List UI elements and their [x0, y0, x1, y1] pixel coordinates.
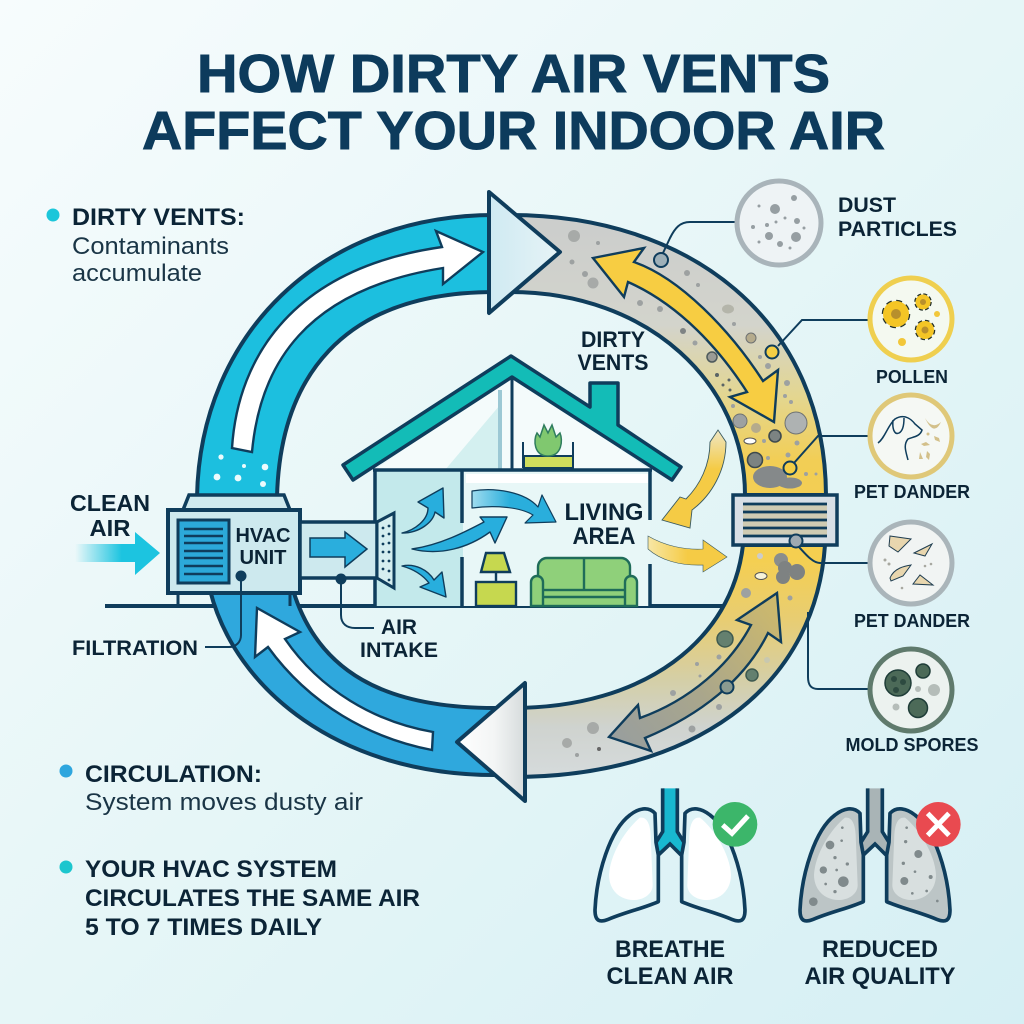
- white flow arrow upper: [232, 231, 483, 452]
- label: living area: [564, 499, 644, 550]
- text block: hvac fact: [60, 856, 420, 941]
- label: living area: AREA: [572, 523, 636, 550]
- contaminant particles: [562, 230, 818, 757]
- hvac unit: [168, 495, 300, 606]
- label: reduced air quality: [804, 936, 956, 990]
- icon: dirty lungs: [800, 788, 961, 921]
- label: breathe clean air: BREATHE: [615, 936, 725, 963]
- callout: mold spores: MOLD SPORES: [846, 735, 978, 755]
- hvac unit: UNIT: [240, 547, 286, 569]
- dirty vent grille: [733, 495, 837, 545]
- text block: dirty vents: Contaminants: [72, 233, 229, 260]
- label: living area: LIVING: [564, 499, 644, 526]
- callout: filtration: FILTRATION: [72, 637, 198, 660]
- callout: dust particles: PARTICLES: [838, 218, 957, 241]
- text block: hvac fact: 5 TO 7 TIMES DAILY: [85, 914, 322, 941]
- label: clean air: CLEAN: [70, 490, 150, 516]
- callout: air intake: INTAKE: [360, 639, 438, 662]
- duct to house: [300, 522, 377, 578]
- walls: [373, 470, 652, 606]
- callout: air intake: [336, 574, 438, 662]
- label: breathe clean air: CLEAN AIR: [606, 963, 734, 990]
- sofa: [531, 558, 637, 606]
- text block: circulation: CIRCULATION:: [85, 761, 262, 788]
- room air arrows: [402, 488, 507, 597]
- floor line: [105, 604, 735, 608]
- callout: dust particles: [654, 181, 957, 267]
- air bubbles: [214, 454, 268, 487]
- callout: air intake: AIR: [381, 616, 417, 639]
- label: reduced air quality: REDUCED: [822, 936, 938, 963]
- text block: dirty vents: [46, 204, 245, 287]
- title: [142, 44, 885, 161]
- ring arrowhead lower: [457, 683, 525, 801]
- living room: [463, 470, 650, 606]
- label: dirty vents: VENTS: [578, 350, 648, 375]
- house: [343, 356, 681, 606]
- perforated supply vent: [377, 513, 394, 588]
- ring: dirty duct: [510, 215, 826, 777]
- label: dirty vents: DIRTY: [581, 327, 645, 352]
- roof with chimney: [343, 356, 681, 480]
- text block: circulation: System moves dusty air: [85, 789, 363, 816]
- callout: pet dander one: [784, 395, 970, 502]
- callout: pet dander two: [790, 522, 970, 631]
- attic: [375, 372, 650, 470]
- white flow arrow lower: [255, 608, 433, 750]
- clean air arrow: [75, 532, 160, 575]
- label: breathe clean air: [606, 936, 734, 990]
- ring: return duct: [210, 590, 495, 775]
- callout: dust particles: DUST: [838, 194, 896, 217]
- living room air arrow: [472, 490, 556, 523]
- label: clean air: [70, 490, 150, 541]
- text block: dirty vents: accumulate: [72, 260, 202, 287]
- side room: [375, 470, 463, 606]
- callout: pollen: [766, 278, 952, 387]
- callout: mold spores: [720, 612, 978, 755]
- yellow double arrow upper: [593, 248, 778, 422]
- plant: [523, 425, 573, 468]
- label: dirty vents: [578, 327, 648, 375]
- text block: dirty vents: DIRTY VENTS:: [72, 204, 245, 231]
- callout: pet dander one: PET DANDER: [854, 482, 970, 502]
- icon: clean lungs: [595, 788, 757, 921]
- ring arrowhead upper: [489, 192, 560, 313]
- lamp and side table: [476, 553, 516, 606]
- callout: filtration: [72, 570, 246, 660]
- callout: pollen: POLLEN: [876, 367, 948, 387]
- text block: hvac fact: CIRCULATES THE SAME AIR: [85, 885, 420, 912]
- filter grille: [178, 520, 229, 583]
- label: clean air: AIR: [90, 515, 131, 541]
- yellow air arrow to vent: [648, 536, 727, 572]
- ring: clean air supply duct: [197, 215, 495, 497]
- text block: circulation: [60, 761, 363, 816]
- callout: pet dander two: PET DANDER: [854, 611, 970, 631]
- title: HOW DIRTY AIR VENTS: [197, 44, 830, 104]
- gray double arrow lower: [609, 593, 781, 751]
- label: reduced air quality: AIR QUALITY: [804, 963, 956, 990]
- title: AFFECT YOUR INDOOR AIR: [142, 101, 885, 161]
- text block: hvac fact: YOUR HVAC SYSTEM: [85, 856, 337, 883]
- hvac unit: HVAC: [236, 525, 290, 547]
- yellow air arrow into room: [662, 430, 726, 528]
